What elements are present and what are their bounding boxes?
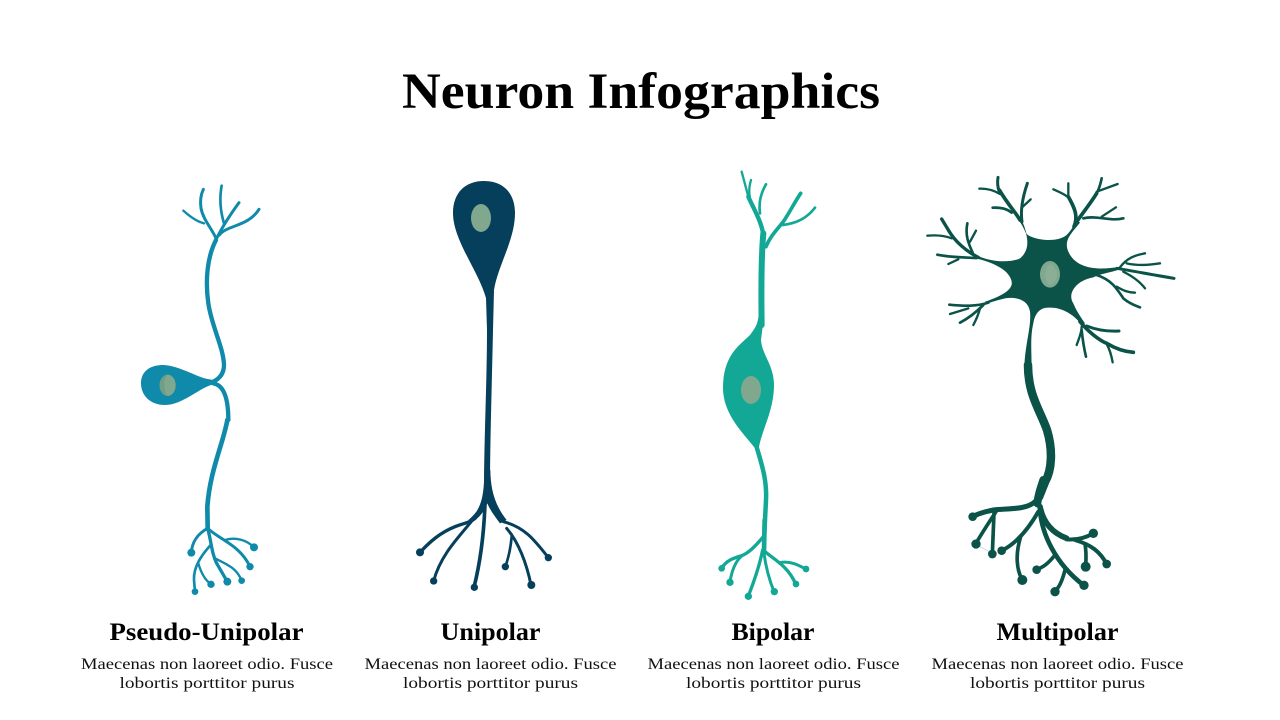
label: Pseudo-Unipolar: Maecenas non laoreet odio. Fusce <box>81 656 333 673</box>
label: Multipolar <box>932 619 1184 692</box>
title: Neuron Infographics <box>402 64 880 120</box>
label: Bipolar <box>648 619 900 692</box>
label: Pseudo-Unipolar <box>81 619 333 692</box>
neuron: bipolar <box>718 172 815 600</box>
label: Bipolar: lobortis porttitor purus <box>686 675 861 692</box>
label: Unipolar <box>364 619 617 692</box>
label: Unipolar: Unipolar <box>440 619 540 646</box>
label: Multipolar: Multipolar <box>996 619 1118 646</box>
label: Pseudo-Unipolar: Pseudo-Unipolar <box>110 619 304 646</box>
label: Unipolar: lobortis porttitor purus <box>403 675 578 692</box>
neuron: multipolar <box>927 177 1174 596</box>
neuron: pseudo-unipolar <box>141 186 259 595</box>
label: Unipolar: Maecenas non laoreet odio. Fusce <box>364 656 617 673</box>
label: Bipolar: Bipolar <box>732 619 814 646</box>
label: Pseudo-Unipolar: lobortis porttitor purus <box>120 675 294 692</box>
label: Multipolar: lobortis porttitor purus <box>970 675 1145 692</box>
neuron: unipolar <box>416 181 552 591</box>
label: Bipolar: Maecenas non laoreet odio. Fusce <box>648 656 900 673</box>
label: Multipolar: Maecenas non laoreet odio. Fusce <box>932 656 1184 673</box>
